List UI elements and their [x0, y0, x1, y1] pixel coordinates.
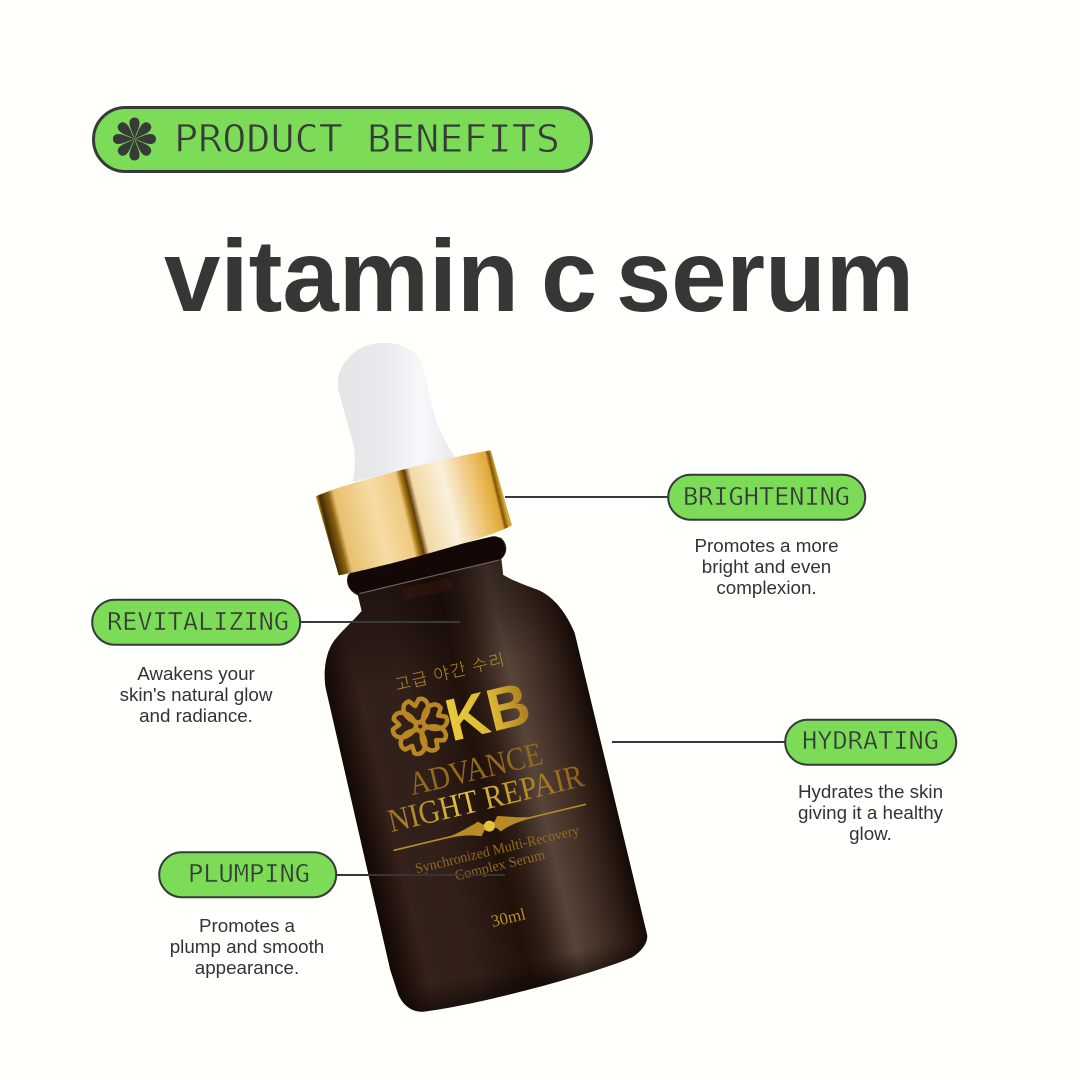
- callout: hydrating: glow.: [849, 823, 892, 844]
- bottle label: [353, 634, 614, 949]
- callout: revitalizing: skin's natural glow: [120, 684, 273, 705]
- korean line: 고급 야간 수리: [392, 645, 508, 696]
- title: serum: [616, 219, 914, 333]
- glass bottle body: [298, 526, 653, 1020]
- callout: plumping: [159, 852, 505, 978]
- product name line 1: ADVANCE: [406, 736, 546, 803]
- callout: brightening: BRIGHTENING: [683, 482, 850, 511]
- ornament divider: [391, 795, 588, 857]
- icon: eight-petal flower: [113, 118, 156, 160]
- product photo: serum bottle: [277, 439, 653, 1020]
- callout: hydrating: [612, 720, 956, 844]
- callout: revitalizing: [92, 600, 460, 726]
- volume: 30ml: [489, 904, 528, 931]
- callout: plumping: Promotes a: [199, 915, 296, 936]
- callout: hydrating: giving it a healthy: [798, 802, 944, 823]
- callout: brightening: complexion.: [716, 577, 817, 598]
- bottle label: Complex Serum: [453, 847, 547, 884]
- logo KB: KB: [439, 669, 536, 754]
- product name line 2: NIGHT REPAIR: [385, 758, 587, 840]
- callout: hydrating: Hydrates the skin: [798, 781, 943, 802]
- callout: brightening: [505, 475, 865, 598]
- neck ring: [346, 534, 511, 612]
- title: vitamin: [164, 219, 519, 333]
- callout: revitalizing: REVITALIZING: [107, 607, 289, 636]
- badge: product benefits: PRODUCT BENEFITS: [174, 117, 560, 162]
- callout: brightening: bright and even: [702, 556, 831, 577]
- gold cap: [314, 448, 514, 577]
- callout: plumping: PLUMPING: [188, 859, 310, 888]
- callout: revitalizing: Awakens your: [137, 663, 255, 684]
- callout: hydrating: HYDRATING: [802, 726, 939, 755]
- callout: revitalizing: and radiance.: [139, 705, 253, 726]
- logo flower: [385, 693, 456, 762]
- callout: plumping: appearance.: [195, 957, 299, 978]
- bottle shading: [298, 526, 653, 1020]
- dropper bulb: [338, 343, 455, 482]
- badge: product benefits: [94, 108, 592, 172]
- title: [164, 219, 914, 333]
- callout: brightening: Promotes a more: [694, 535, 839, 556]
- subtitle: Synchronized Multi-Recovery: [414, 822, 581, 877]
- title: c: [541, 219, 597, 333]
- callout: plumping: plump and smooth: [170, 936, 324, 957]
